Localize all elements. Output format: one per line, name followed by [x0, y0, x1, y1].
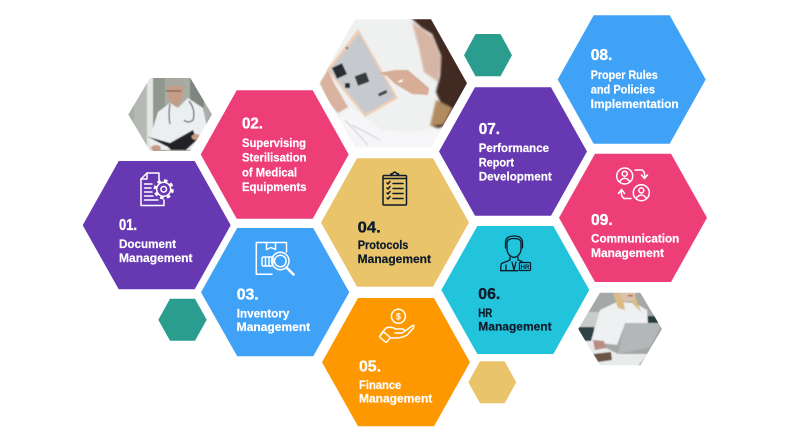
panel: 03 Inventory Management: 03.	[237, 287, 259, 304]
icon: two people exchanging arrows	[617, 168, 649, 201]
panel: 06 HR Management: HR	[478, 306, 493, 320]
decorative hexagon: teal top	[464, 34, 512, 76]
panel: 02 Supervising Sterilisation of Medical Equipments: 02.	[242, 115, 263, 132]
panel: 05 Finance Management: Finance	[359, 378, 402, 392]
panel: 08 Proper Rules and Policies Implementation: 08.	[591, 47, 612, 64]
panel: 03 Inventory Management: Inventory	[237, 307, 290, 321]
panel: 07 Performance Report Development	[439, 87, 587, 216]
panel: 06 HR Management	[441, 226, 589, 354]
panel: 05 Finance Management	[322, 298, 470, 426]
panel: 08 Proper Rules and Policies Implementation: Implementation	[591, 97, 679, 111]
panel: 03 Inventory Management: Management	[237, 320, 310, 334]
icon: HR representative with headset	[501, 236, 530, 271]
photo: person using a tablet	[315, 15, 470, 150]
icon: clipboard checklist	[383, 172, 406, 205]
icon: HR representative with headset: HR	[521, 265, 530, 271]
panel: 08 Proper Rules and Policies Implementation: and Policies	[591, 82, 655, 96]
decorative hexagon: teal left	[158, 299, 207, 341]
panel: 02 Supervising Sterilisation of Medical Equipments	[201, 90, 349, 219]
panel: 01 Document Management	[83, 161, 231, 289]
panel: 08 Proper Rules and Policies Implementation: Proper Rules	[591, 68, 658, 82]
panel: 01 Document Management: Management	[119, 251, 193, 265]
panel: 06 HR Management: 06.	[478, 286, 500, 303]
panel: 01 Document Management: Document	[119, 237, 176, 251]
panel: 04 Protocols Management: 04.	[358, 219, 381, 236]
panel: 02 Supervising Sterilisation of Medical Equipments: of Medical	[242, 166, 297, 180]
panel: 08 Proper Rules and Policies Implementation	[558, 15, 706, 144]
panel: 05 Finance Management: 05.	[359, 358, 381, 375]
panel: 09 Communication Management	[559, 154, 707, 282]
icon: box with magnifier	[256, 242, 294, 274]
panel: 02 Supervising Sterilisation of Medical Equipments: Equipments	[242, 180, 307, 194]
panel: 06 HR Management: Management	[478, 320, 552, 334]
panel: 01 Document Management: 01.	[119, 217, 137, 234]
panel: 07 Performance Report Development: Report	[479, 156, 514, 170]
panel: 09 Communication Management: 09.	[591, 212, 613, 229]
panel: 07 Performance Report Development: Development	[479, 170, 552, 184]
icon: hand holding coin: $	[396, 312, 401, 322]
panel: 09 Communication Management: Communication	[591, 231, 679, 245]
photo: doctor reading a folder	[128, 78, 212, 151]
icon: document with gear	[141, 173, 172, 206]
photo: woman working on a laptop	[578, 292, 662, 366]
panel: 02 Supervising Sterilisation of Medical Equipments: Supervising	[242, 136, 306, 150]
panel: 07 Performance Report Development: 07.	[479, 121, 500, 138]
panel: 04 Protocols Management: Management	[358, 252, 431, 266]
decorative hexagon: gold bottom	[468, 361, 516, 403]
panel: 09 Communication Management: Management	[591, 246, 664, 260]
woman's face and hair	[410, 17, 470, 128]
panel: 04 Protocols Management	[321, 158, 469, 287]
panel: 03 Inventory Management	[201, 228, 349, 356]
panel: 04 Protocols Management: Protocols	[358, 238, 409, 252]
panel: 07 Performance Report Development: Performance	[479, 141, 549, 155]
panel: 05 Finance Management: Management	[359, 392, 432, 406]
panel: 02 Supervising Sterilisation of Medical Equipments: Sterilisation	[242, 151, 306, 165]
icon: hand holding coin	[379, 309, 414, 343]
